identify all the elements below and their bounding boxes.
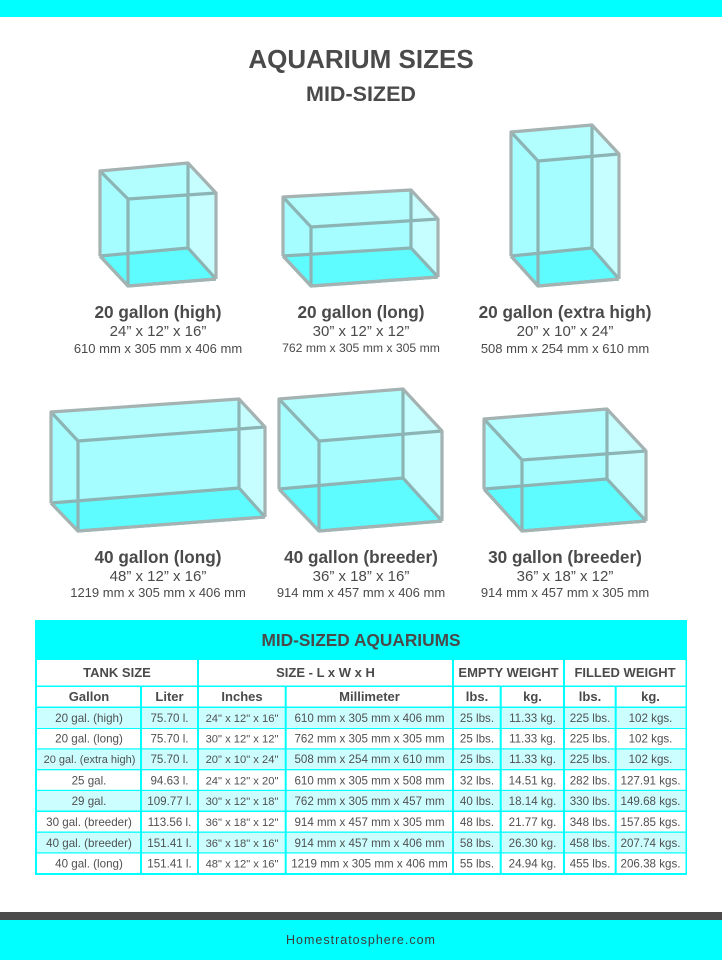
tank: 20 gallon (extra high) <box>511 125 619 286</box>
row: 20 gal. (high): 75.70 l. <box>150 712 189 725</box>
caption: 20 gallon (high) <box>74 302 242 356</box>
caption: 20 gallon (high): 24” x 12” x 16” <box>110 323 206 340</box>
row: 30 gal. (breeder): 36" x 18" x 12" <box>206 817 278 829</box>
column headers: kg. <box>523 689 542 704</box>
row: 20 gal. (high): 20 gal. (high) <box>55 712 123 725</box>
caption: 40 gallon (breeder): 914 mm x 457 mm x 406 mm <box>277 585 445 600</box>
caption: 30 gallon (breeder) <box>481 547 649 600</box>
caption: 20 gallon (extra high): 508 mm x 254 mm x 610 mm <box>481 341 649 356</box>
row: 20 gal. (long): 30" x 12" x 12" <box>206 734 278 746</box>
group headers: EMPTY WEIGHT <box>458 665 559 680</box>
row: 20 gal. (high) <box>55 712 672 725</box>
tank: 20 gallon (high) <box>100 163 216 286</box>
row: 20 gal. (extra high): 25 lbs. <box>460 753 494 766</box>
row: 25 gal.: 127.91 kgs. <box>621 774 680 788</box>
caption: 40 gallon (breeder): 40 gallon (breeder) <box>284 547 438 567</box>
row: 20 gal. (extra high): 225 lbs. <box>570 753 610 766</box>
table row bands <box>37 660 686 873</box>
column headers: Liter <box>155 689 184 704</box>
row: 20 gal. (high): 225 lbs. <box>570 712 610 725</box>
caption: 20 gallon (long): 762 mm x 305 mm x 305 mm <box>282 341 440 355</box>
row: 25 gal.: 25 gal. <box>72 774 106 788</box>
row: 40 gal. (breeder): 914 mm x 457 mm x 406 mm <box>294 837 445 850</box>
row: 40 gal. (breeder): 207.74 kgs. <box>621 837 680 850</box>
row: 29 gal.: 30" x 12" x 18" <box>206 796 278 808</box>
column headers: Inches <box>221 689 263 704</box>
tank: 40 gallon (breeder) <box>279 389 442 531</box>
row: 20 gal. (high): 610 mm x 305 mm x 406 mm <box>294 712 445 725</box>
caption: 30 gallon (breeder): 914 mm x 457 mm x 305 mm <box>481 585 649 600</box>
row: 40 gal. (breeder): 26.30 kg. <box>509 837 556 850</box>
row: 20 gal. (extra high): 508 mm x 254 mm x 610 mm <box>294 753 445 766</box>
row: 29 gal.: 18.14 kg. <box>509 795 556 808</box>
row: 40 gal. (long): 24.94 kg. <box>509 858 556 870</box>
column headers: lbs. <box>466 689 488 704</box>
row: 20 gal. (extra high): 20" x 10" x 24" <box>206 754 278 766</box>
caption: 30 gallon (breeder): 36” x 18” x 12” <box>517 568 613 585</box>
caption: 40 gallon (breeder) <box>277 547 445 600</box>
row: 29 gal.: 109.77 l. <box>147 795 192 808</box>
row: 40 gal. (long): 1219 mm x 305 mm x 406 mm <box>291 858 448 870</box>
row: 40 gal. (long): 206.38 kgs. <box>621 858 680 870</box>
row: 40 gal. (long): 48" x 12" x 16" <box>206 858 278 870</box>
row: 30 gal. (breeder): 48 lbs. <box>460 816 494 829</box>
row: 20 gal. (extra high): 75.70 l. <box>150 753 189 766</box>
row: 25 gal.: 94.63 l. <box>150 774 189 788</box>
row: 29 gal.: 40 lbs. <box>460 795 494 808</box>
top bar <box>0 0 722 17</box>
row: 20 gal. (extra high): 11.33 kg. <box>509 753 556 766</box>
caption: 20 gallon (high): 610 mm x 305 mm x 406 mm <box>74 341 242 356</box>
row: 40 gal. (long): 455 lbs. <box>570 858 610 870</box>
row: 29 gal. <box>72 795 680 808</box>
caption: 20 gallon (extra high) <box>479 302 651 356</box>
tank: 30 gallon (breeder) <box>484 409 646 531</box>
row: 40 gal. (breeder): 36" x 18" x 16" <box>206 838 278 850</box>
caption: 20 gallon (long) <box>282 302 440 355</box>
group headers: SIZE - L x W x H <box>276 665 375 680</box>
row: 25 gal.: 32 lbs. <box>460 774 494 788</box>
tank: 20 gallon (long) <box>283 190 438 286</box>
row: 20 gal. (long): 11.33 kg. <box>509 732 556 746</box>
caption: 20 gallon (long): 20 gallon (long) <box>298 302 424 322</box>
group headers <box>83 665 676 680</box>
group headers: FILLED WEIGHT <box>574 665 676 680</box>
row: 25 gal.: 282 lbs. <box>570 774 610 788</box>
caption: 40 gallon (long) <box>70 547 246 600</box>
column headers: Millimeter <box>339 689 400 704</box>
row: 29 gal.: 29 gal. <box>72 795 106 808</box>
row: 29 gal.: 330 lbs. <box>570 795 610 808</box>
row: 20 gal. (long): 225 lbs. <box>570 732 610 746</box>
row: 40 gal. (long) <box>55 858 680 870</box>
table heading: MID-SIZED AQUARIUMS <box>261 630 461 650</box>
group headers: TANK SIZE <box>83 665 151 680</box>
row: 20 gal. (extra high): 102 kgs. <box>629 753 672 766</box>
column headers <box>69 689 660 704</box>
row: 20 gal. (long): 102 kgs. <box>629 732 672 746</box>
row: 25 gal.: 14.51 kg. <box>509 774 556 788</box>
row: 20 gal. (high): 24" x 12" x 16" <box>206 713 278 725</box>
caption: 40 gallon (breeder): 36” x 18” x 16” <box>313 568 409 585</box>
row: 40 gal. (breeder): 58 lbs. <box>460 837 494 850</box>
caption: 20 gallon (extra high): 20” x 10” x 24” <box>517 323 613 340</box>
row: 30 gal. (breeder): 21.77 kg. <box>509 816 556 829</box>
row: 20 gal. (extra high): 20 gal. (extra high) <box>44 754 135 766</box>
caption: 40 gallon (long): 48” x 12” x 16” <box>110 568 206 585</box>
table: mid-sized aquariums <box>35 620 687 875</box>
row: 20 gal. (long) <box>55 732 672 746</box>
tank: 40 gallon (long) <box>51 399 265 531</box>
row: 29 gal.: 762 mm x 305 mm x 457 mm <box>294 795 445 808</box>
row: 40 gal. (long): 40 gal. (long) <box>55 858 123 870</box>
footer text: Homestratosphere.com <box>286 933 436 947</box>
caption: 20 gallon (long): 30” x 12” x 12” <box>313 323 409 340</box>
row: 40 gal. (breeder): 40 gal. (breeder) <box>46 837 132 850</box>
subtitle: MID-SIZED <box>306 82 416 106</box>
row: 20 gal. (long): 25 lbs. <box>460 732 494 746</box>
row: 25 gal.: 610 mm x 305 mm x 508 mm <box>294 774 445 788</box>
caption: 40 gallon (long): 1219 mm x 305 mm x 406 mm <box>70 585 246 600</box>
row: 40 gal. (long): 151.41 l. <box>147 858 192 870</box>
row: 20 gal. (long): 75.70 l. <box>150 732 189 746</box>
column headers: Gallon <box>69 689 109 704</box>
row: 40 gal. (long): 55 lbs. <box>460 858 494 870</box>
row: 30 gal. (breeder): 113.56 l. <box>148 816 191 829</box>
row: 30 gal. (breeder): 914 mm x 457 mm x 305 mm <box>294 816 445 829</box>
row: 20 gal. (long): 762 mm x 305 mm x 305 mm <box>294 732 445 746</box>
row: 20 gal. (high): 25 lbs. <box>460 712 494 725</box>
caption: 20 gallon (extra high): 20 gallon (extra high) <box>479 302 651 322</box>
caption: 20 gallon (high): 20 gallon (high) <box>94 302 222 322</box>
row: 30 gal. (breeder): 157.85 kgs. <box>621 816 680 829</box>
caption: 30 gallon (breeder): 30 gallon (breeder) <box>488 547 642 567</box>
row: 20 gal. (high): 11.33 kg. <box>509 712 556 725</box>
row: 40 gal. (breeder): 151.41 l. <box>147 837 192 850</box>
row: 25 gal. <box>72 774 680 788</box>
row: 30 gal. (breeder): 30 gal. (breeder) <box>46 816 132 829</box>
column headers: lbs. <box>579 689 601 704</box>
row: 20 gal. (high): 102 kgs. <box>629 712 672 725</box>
row: 40 gal. (breeder): 458 lbs. <box>570 837 610 850</box>
caption: 40 gallon (long): 40 gallon (long) <box>94 547 222 567</box>
column headers: kg. <box>641 689 660 704</box>
row: 30 gal. (breeder): 348 lbs. <box>570 816 610 829</box>
footer <box>0 912 722 960</box>
row: 20 gal. (extra high) <box>44 753 672 766</box>
row: 30 gal. (breeder) <box>46 816 680 829</box>
row: 29 gal.: 149.68 kgs. <box>621 795 680 808</box>
row: 25 gal.: 24" x 12" x 20" <box>206 776 278 788</box>
table column lines <box>141 660 616 874</box>
title: AQUARIUM SIZES <box>248 44 474 74</box>
row: 20 gal. (long): 20 gal. (long) <box>55 732 123 746</box>
row: 40 gal. (breeder) <box>46 837 680 850</box>
